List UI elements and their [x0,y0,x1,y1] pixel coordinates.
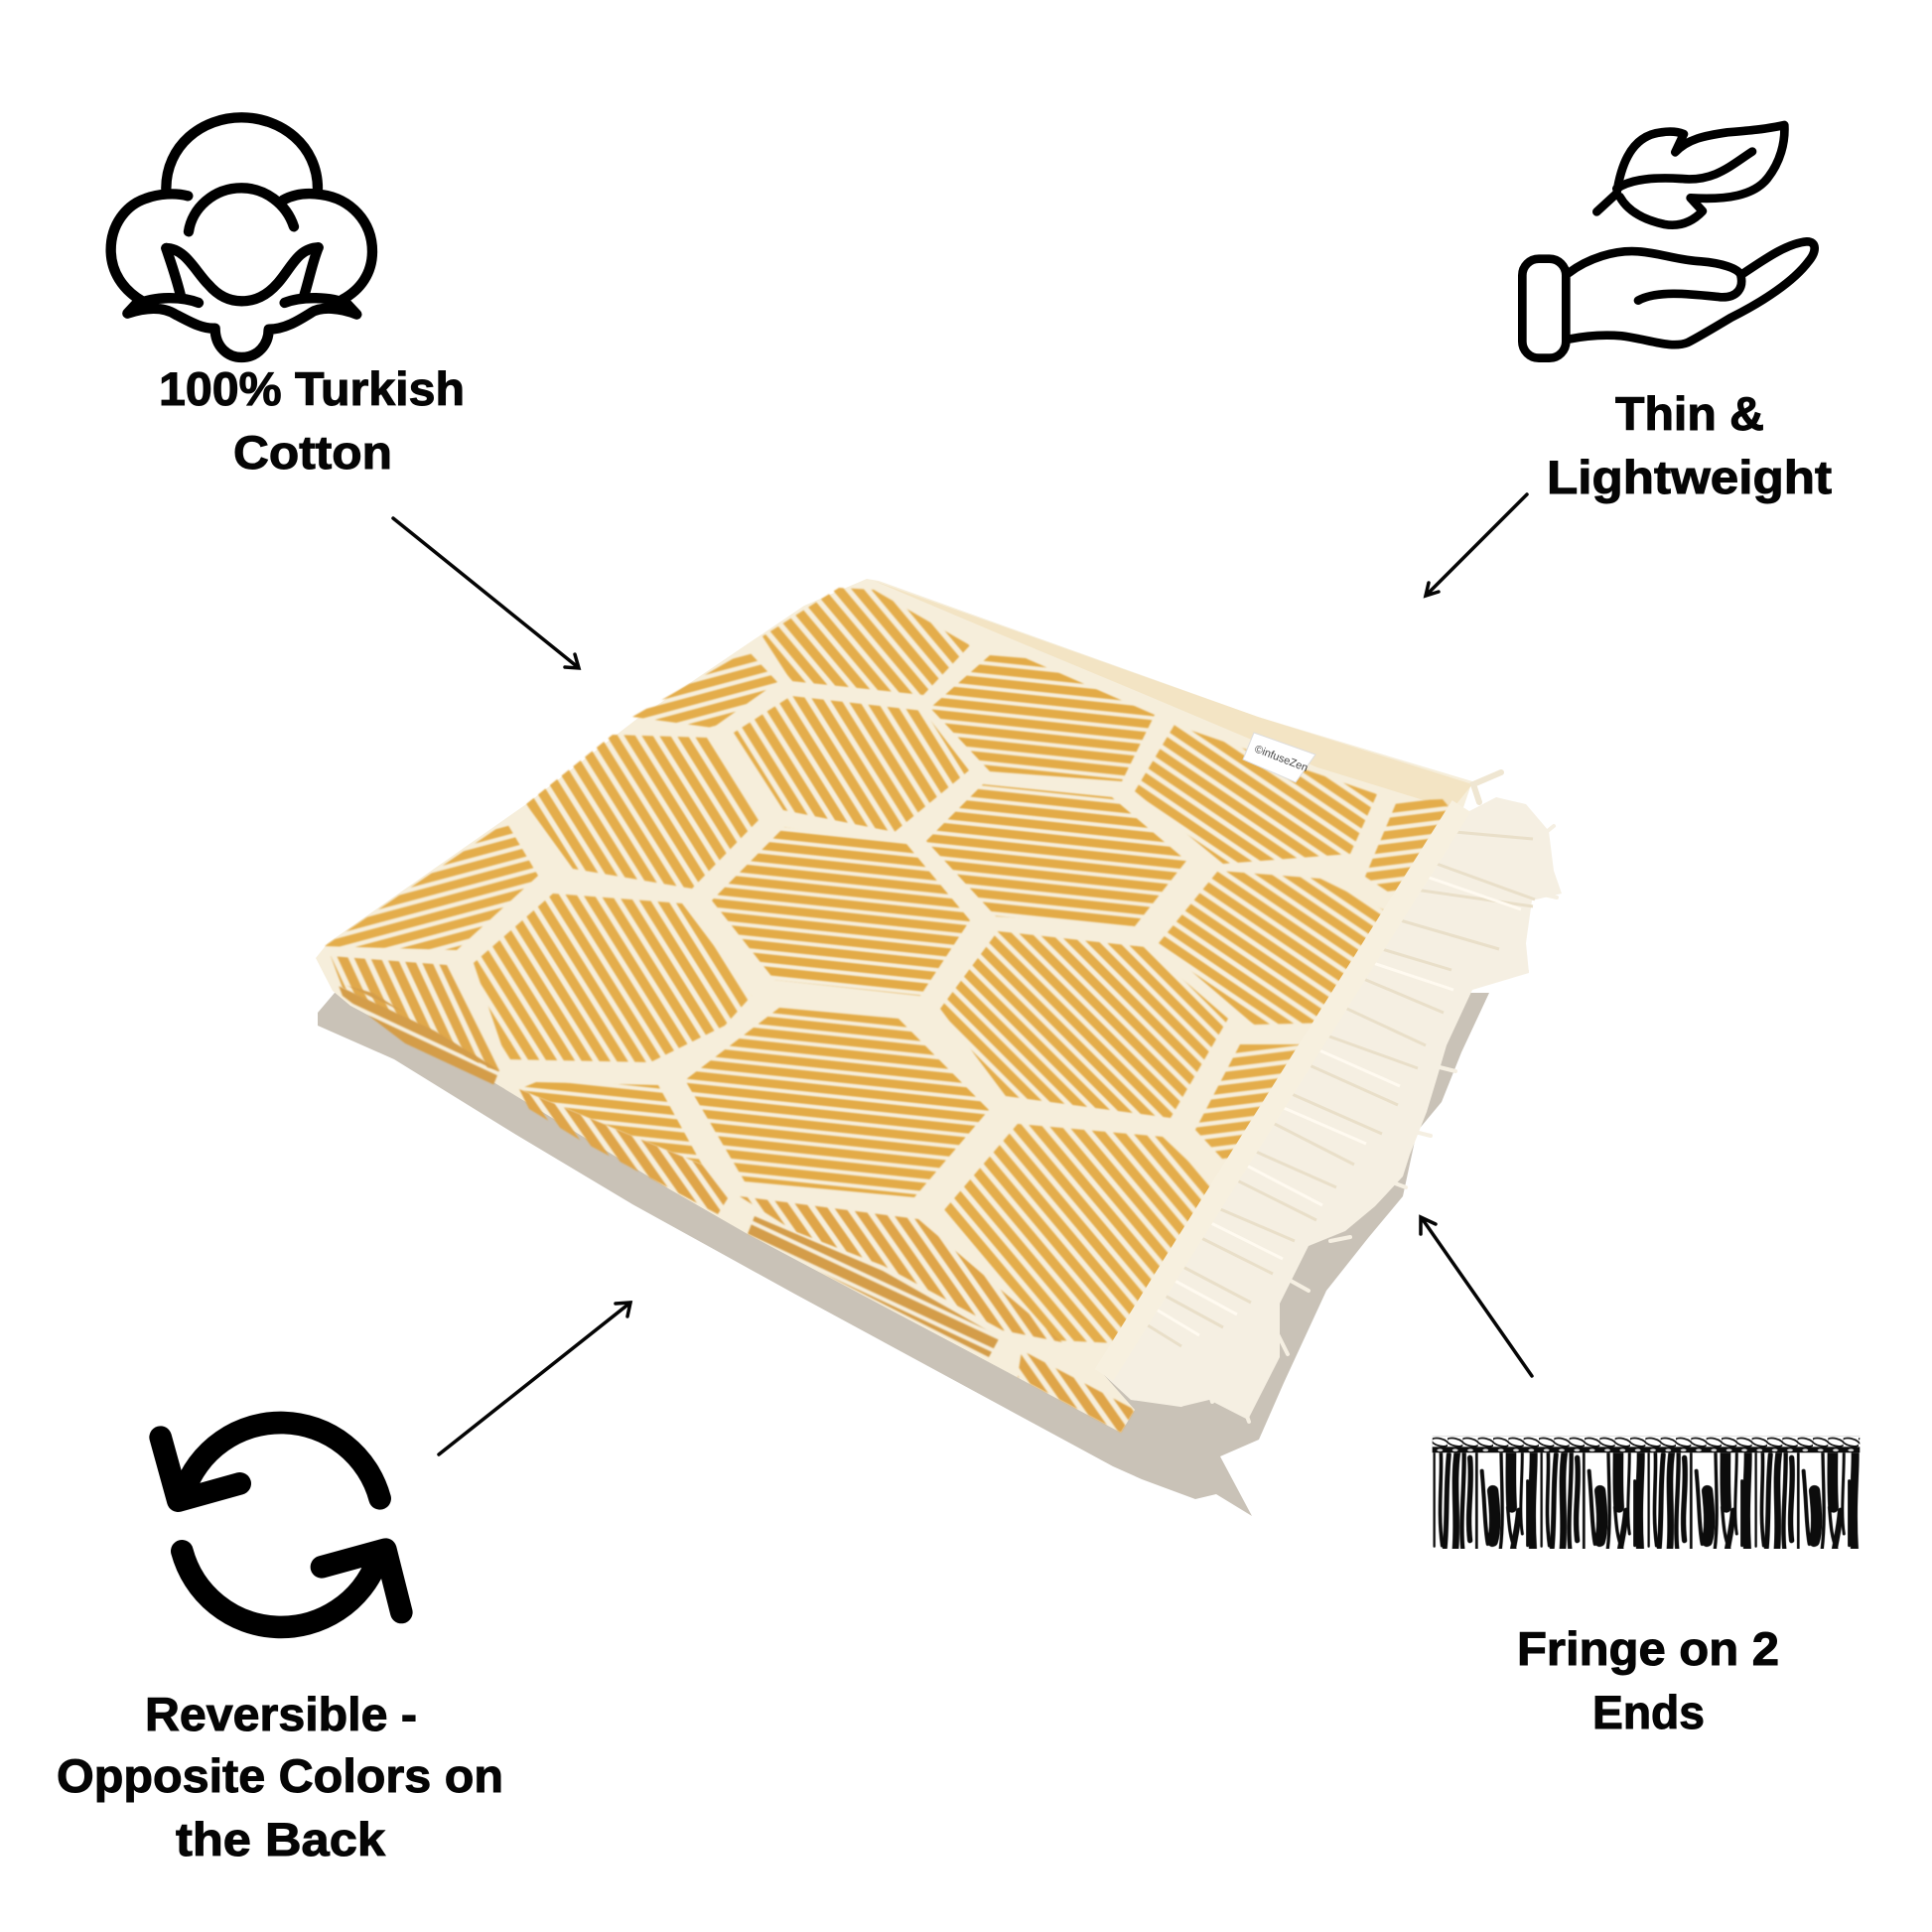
heading: Reversible - Opposite Colors on the Back: Reversible - [145,1688,417,1740]
icon: fringe strip [1433,1437,1860,1549]
hem [1104,806,1461,1375]
heading: Thin & Lightweight: Lightweight [1547,451,1832,503]
honeycomb hexagons [325,588,1452,1343]
brand label: ©infuseZen [1253,744,1310,774]
towel shadow [318,993,1489,1516]
icon: reversible circular arrows [161,1423,401,1627]
heading: Thin & Lightweight [1547,387,1832,503]
folded side layers [338,983,1135,1433]
heading: Thin & Lightweight: Thin & [1615,387,1764,440]
heading: 100% Turkish Cotton [159,362,465,479]
heading: Fringe on 2 Ends: Ends [1592,1686,1705,1738]
heading: 100% Turkish Cotton: Cotton [233,426,392,479]
heading: Reversible - Opposite Colors on the Back: the Back [176,1813,386,1865]
fringe [1104,772,1562,1422]
arrow: reversible to towel [439,1303,630,1454]
heading: Reversible - Opposite Colors on the Back: Opposite Colors on [57,1749,503,1802]
selvedge top edge [874,581,1472,809]
heading: Reversible - Opposite Colors on the Back [57,1688,503,1865]
heading: Fringe on 2 Ends [1517,1622,1779,1738]
heading: Fringe on 2 Ends: Fringe on 2 [1517,1622,1779,1675]
icon: feather over open hand [1522,125,1815,358]
arrow: cotton to towel [393,518,579,668]
icon: cotton boll [111,117,372,357]
towel: folded honeycomb fabric [316,579,1562,1433]
arrow: fringe to towel [1421,1217,1532,1376]
towel base [316,579,1472,1433]
brand label [1243,733,1315,782]
heading: 100% Turkish Cotton: 100% Turkish [159,362,465,415]
arrow: lightweight to towel [1426,494,1527,596]
